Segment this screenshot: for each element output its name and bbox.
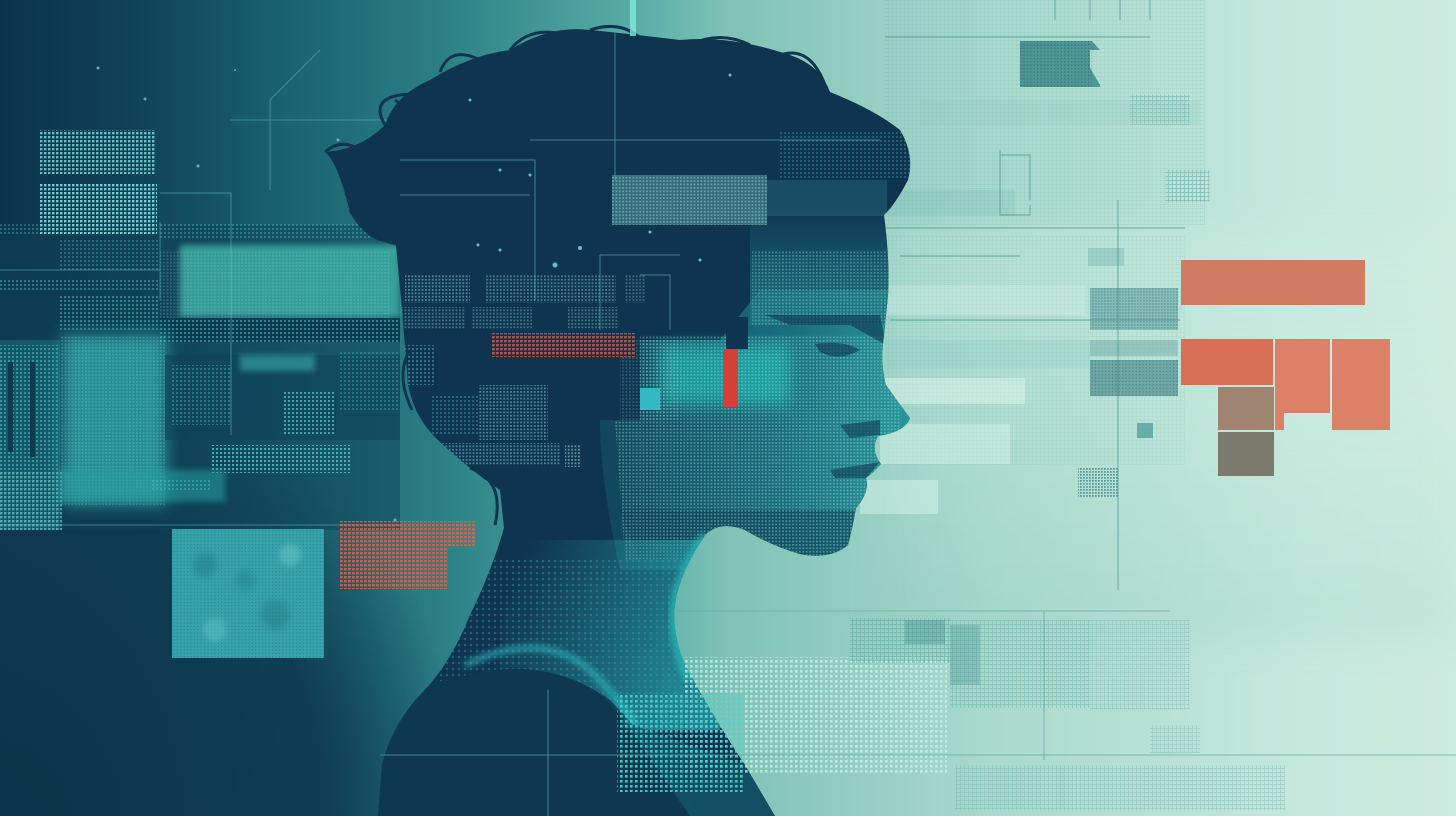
red vertical bar (723, 349, 738, 407)
textured teal square (172, 529, 324, 658)
hair lines (400, 30, 880, 330)
shoulder (392, 668, 637, 740)
collar glow (465, 648, 633, 724)
forehead (750, 220, 888, 325)
shoulder right (625, 722, 775, 816)
stars (468, 74, 732, 268)
face base (600, 290, 920, 570)
forehead dots (752, 250, 902, 325)
curly hair strands (325, 26, 825, 525)
face dots (615, 335, 900, 560)
eye and brow (765, 315, 886, 357)
bottom right schematic (380, 611, 1456, 816)
orange dotted block left (340, 521, 475, 589)
head silhouette (320, 20, 920, 816)
right faded data blocks (860, 0, 1210, 590)
bottom dotted panels (617, 657, 947, 792)
red bar in hair (491, 333, 636, 357)
top light beam (630, 0, 636, 36)
nose shadow and lips (830, 420, 880, 478)
orange blocks right (1181, 260, 1390, 476)
chin shadow (634, 510, 856, 556)
neck dots (440, 560, 710, 740)
cheek glow (660, 345, 790, 405)
hair data bands (612, 175, 767, 225)
left data panels (0, 50, 400, 530)
